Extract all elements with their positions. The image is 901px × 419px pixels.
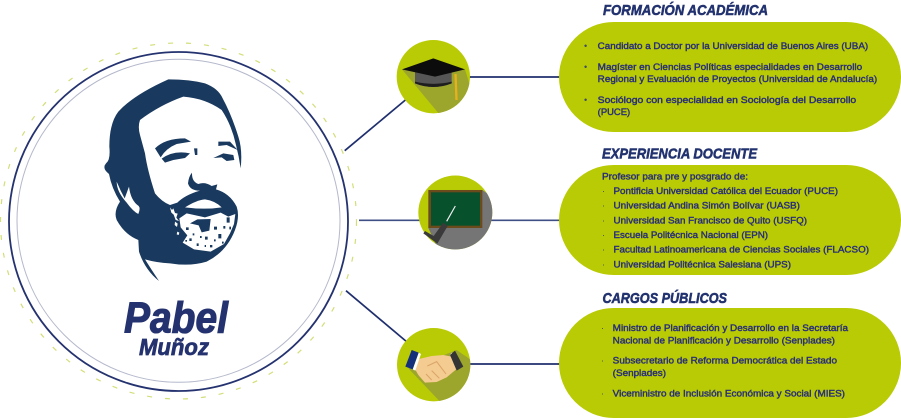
icon: blackboard	[418, 175, 497, 253]
list text	[584, 41, 877, 117]
pill background	[559, 22, 901, 132]
heading: CARGOS PÚBLICOS	[602, 289, 727, 307]
list text: ·	[601, 356, 604, 366]
list text: Pontificia Universidad Católica del Ecuador (PUCE)	[614, 186, 838, 196]
name: Pabel	[124, 294, 229, 343]
list text: Regional y Evaluación de Proyectos (Universidad de Andalucía)	[598, 74, 877, 84]
outer navy ring	[9, 52, 348, 391]
panel: cargos públicos	[559, 289, 901, 418]
pill background	[559, 165, 901, 275]
list text: ·	[601, 323, 604, 333]
list text: ·	[602, 186, 605, 196]
icon: handshake	[397, 328, 473, 403]
heading: FORMACIÓN ACADÉMICA	[603, 1, 768, 19]
portrait badge	[0, 43, 356, 399]
list text: ·	[601, 388, 604, 398]
list text	[602, 172, 869, 270]
ear	[117, 182, 140, 214]
panel: formación académica	[559, 1, 901, 132]
list text: Universidad Politécnica Salesiana (UPS)	[614, 260, 791, 270]
panel: experiencia docente	[559, 146, 901, 275]
list text: ·	[602, 244, 605, 254]
list text: •	[584, 62, 587, 72]
name	[124, 294, 229, 360]
dashed outer ring	[0, 43, 356, 399]
portrait silhouette	[104, 79, 241, 281]
list text: Profesor para pre y posgrado de:	[602, 172, 748, 182]
list text: •	[584, 95, 587, 105]
list text	[601, 323, 849, 398]
list text: ·	[602, 200, 605, 210]
list text: ·	[602, 230, 605, 240]
list text: Candidato a Doctor por la Universidad de Buenos Aires (UBA)	[598, 41, 868, 51]
connector lines	[345, 77, 562, 364]
eyes and brows	[155, 138, 191, 157]
list text: Facultad Latinoamericana de Ciencias Sociales (FLACSO)	[614, 244, 869, 254]
inner grey ring	[17, 59, 340, 382]
list text: Nacional de Planificación y Desarrollo (Senplades)	[613, 336, 835, 346]
list text: ·	[602, 260, 605, 270]
list text: (Senplades)	[613, 368, 666, 378]
heading: EXPERIENCIA DOCENTE	[602, 146, 758, 162]
list text: •	[584, 41, 587, 51]
list text: Sociólogo con especialidad en Sociología del Desarrollo	[598, 95, 856, 105]
list text: Ministro de Planificación y Desarrollo en la Secretaría	[613, 323, 849, 333]
pill background	[559, 308, 901, 418]
name: Muñoz	[139, 334, 209, 360]
icon: graduation cap	[397, 40, 473, 115]
list text: Subsecretario de Reforma Democrática del Estado	[613, 356, 837, 366]
list text: (PUCE)	[598, 107, 630, 117]
list text: Universidad Andina Simón Bolívar (UASB)	[614, 200, 800, 210]
list text: Escuela Politécnica Nacional (EPN)	[614, 230, 768, 240]
list text: Universidad San Francisco de Quito (USFQ)	[614, 216, 807, 226]
list text: Viceministro de Inclusión Económica y Social (MIES)	[613, 388, 845, 398]
list text: Magíster en Ciencias Políticas especialidades en Desarrollo	[598, 62, 862, 72]
list text: ·	[602, 216, 605, 226]
lips and beard highlights	[185, 199, 222, 209]
